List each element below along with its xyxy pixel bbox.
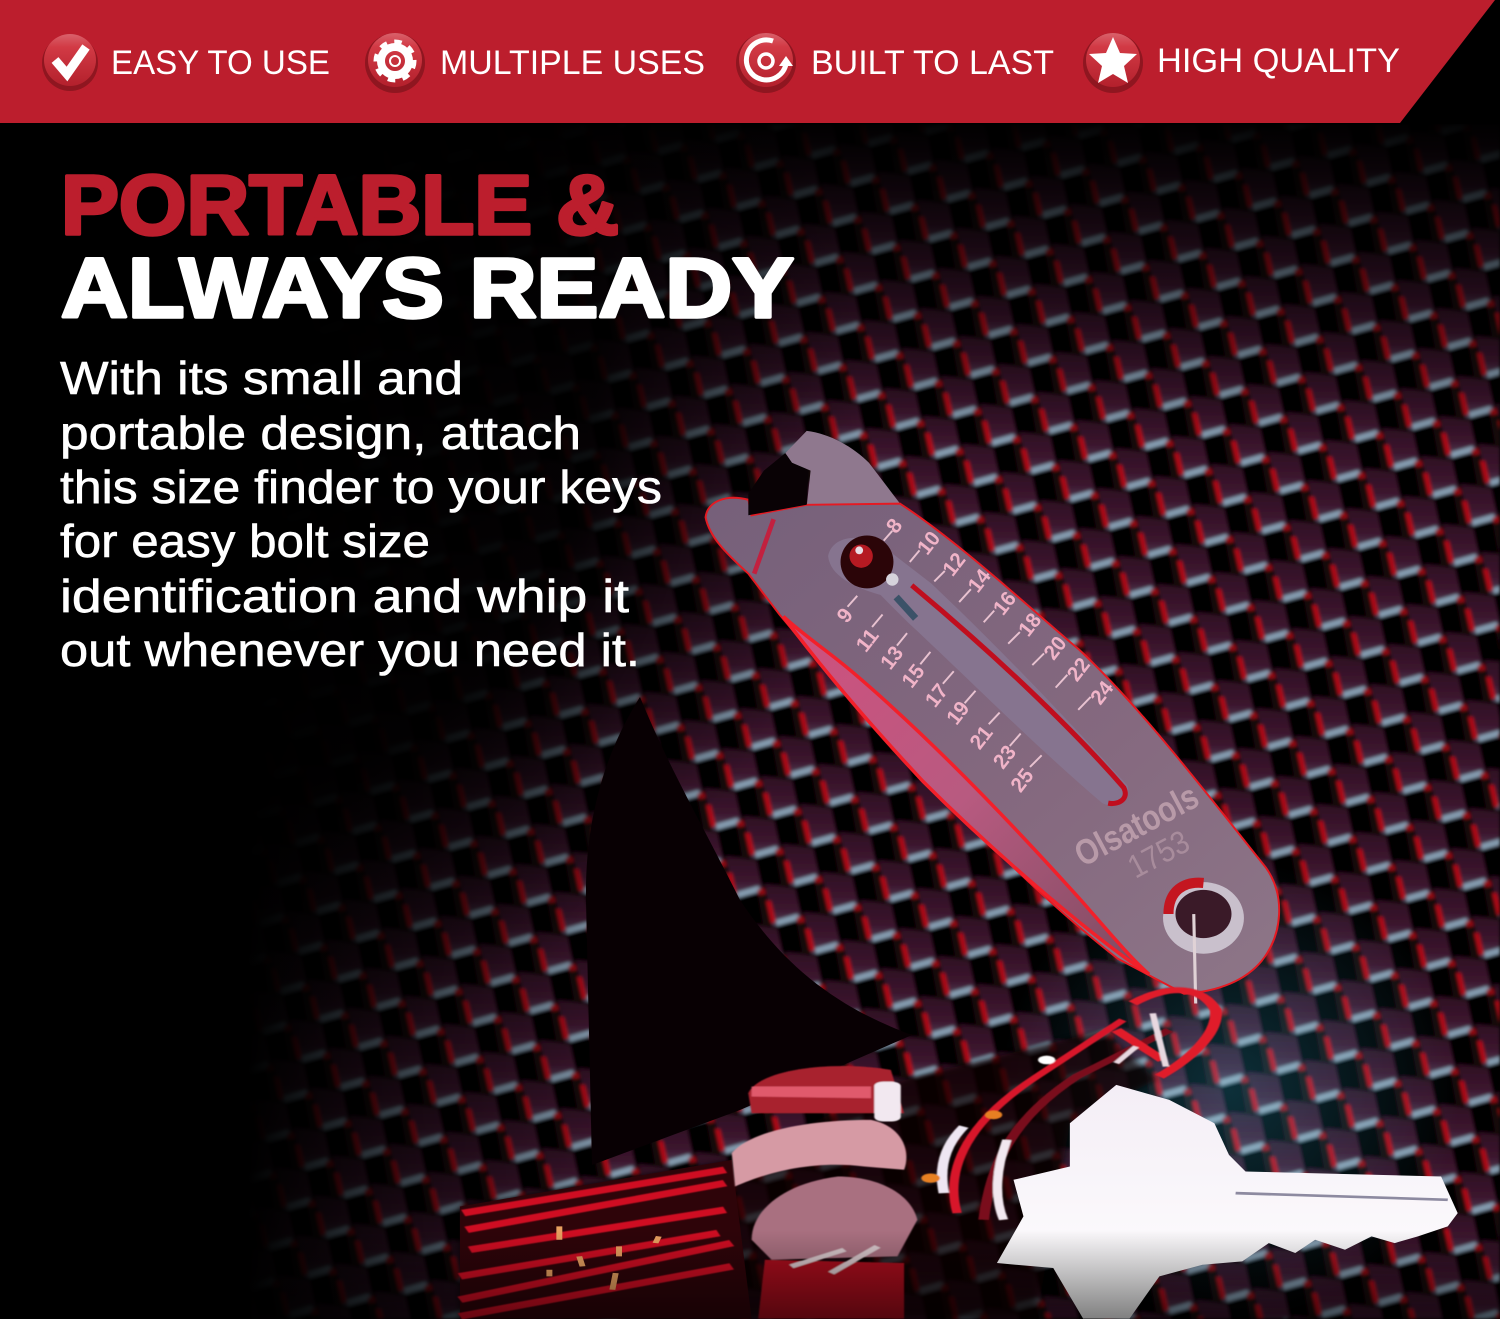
heading line: always ready: ALWAYS READY	[61, 241, 794, 335]
key ring hole	[1163, 882, 1244, 1004]
size scale: even numbers: 10	[913, 527, 945, 559]
red tassel	[460, 1160, 752, 1319]
tool main body	[706, 498, 1279, 994]
leather fob and mesh	[732, 1066, 917, 1319]
size scale: even numbers: 8	[882, 514, 907, 538]
measuring slot	[828, 538, 1128, 805]
tool upper prong	[785, 431, 900, 506]
body text: With its small and	[60, 352, 463, 404]
size scale: odd numbers: 25	[1006, 764, 1039, 797]
red edge streak	[754, 519, 774, 574]
size scale: even numbers: 20	[1040, 632, 1072, 664]
size scale: odd numbers: 17	[921, 680, 953, 712]
size scale: even numbers: 12	[938, 549, 970, 581]
top banner	[0, 0, 1495, 123]
size scale: even numbers: 24	[1086, 677, 1118, 709]
brand engraving: Olsatools	[1068, 776, 1205, 874]
size scale: odd numbers: 21	[966, 722, 998, 754]
body text: out whenever you need it.	[60, 624, 640, 676]
key	[997, 1085, 1458, 1319]
feature: built to last	[736, 33, 1054, 93]
icon: check badge	[42, 34, 98, 91]
keys and accessories	[460, 990, 1458, 1319]
body text: portable design, attach	[60, 407, 581, 459]
size scale: odd numbers: 11	[852, 624, 884, 656]
label: high quality: HIGH QUALITY	[1157, 42, 1400, 80]
label: easy to use: EASY TO USE	[111, 44, 330, 82]
size scale: odd numbers	[833, 604, 1039, 797]
bottom fade	[0, 1230, 1500, 1319]
feature: multiple uses	[365, 33, 705, 93]
feature: high quality	[1083, 33, 1400, 93]
icon: star badge	[1083, 33, 1143, 93]
body text: for easy bolt size	[60, 515, 430, 567]
icon: gear badge	[365, 33, 425, 93]
feature: easy to use	[42, 34, 330, 91]
size scale: odd numbers: 15	[898, 660, 930, 692]
body text	[60, 352, 662, 676]
size scale: even numbers: 22	[1063, 654, 1095, 686]
size scale: even numbers: 18	[1014, 609, 1046, 641]
size scale: even numbers	[882, 514, 1118, 709]
size scale: even numbers: 16	[989, 588, 1021, 620]
heading	[61, 158, 794, 335]
key groove	[1236, 1193, 1448, 1200]
size scale: odd numbers: 9	[833, 604, 858, 627]
body text: this size finder to your keys	[60, 461, 662, 513]
dark backdrop behind keys	[460, 1030, 1156, 1319]
model number: 1753	[1121, 822, 1195, 885]
fabric background photo	[266, 129, 1500, 1319]
notch	[748, 453, 809, 515]
heading line: portable: PORTABLE &	[61, 158, 619, 252]
tool lower bevel	[783, 616, 1149, 974]
slot shadow edge	[896, 597, 916, 618]
icon: cycle gear badge	[736, 33, 796, 93]
keychain tool	[706, 431, 1279, 1004]
dark shadow shape	[586, 697, 912, 1165]
label: built to last: BUILT TO LAST	[811, 44, 1054, 82]
slot red inner edge	[912, 585, 1125, 804]
size scale: even numbers: 14	[964, 565, 996, 597]
screw	[841, 536, 899, 588]
scale tick marks	[848, 531, 1091, 767]
body text: identification and whip it	[60, 570, 629, 622]
label: multiple uses: MULTIPLE USES	[440, 44, 705, 82]
carabiner and chain	[921, 990, 1216, 1220]
size scale: odd numbers: 19	[942, 697, 974, 729]
size scale: odd numbers: 13	[876, 642, 908, 674]
size scale: odd numbers: 23	[989, 741, 1021, 773]
